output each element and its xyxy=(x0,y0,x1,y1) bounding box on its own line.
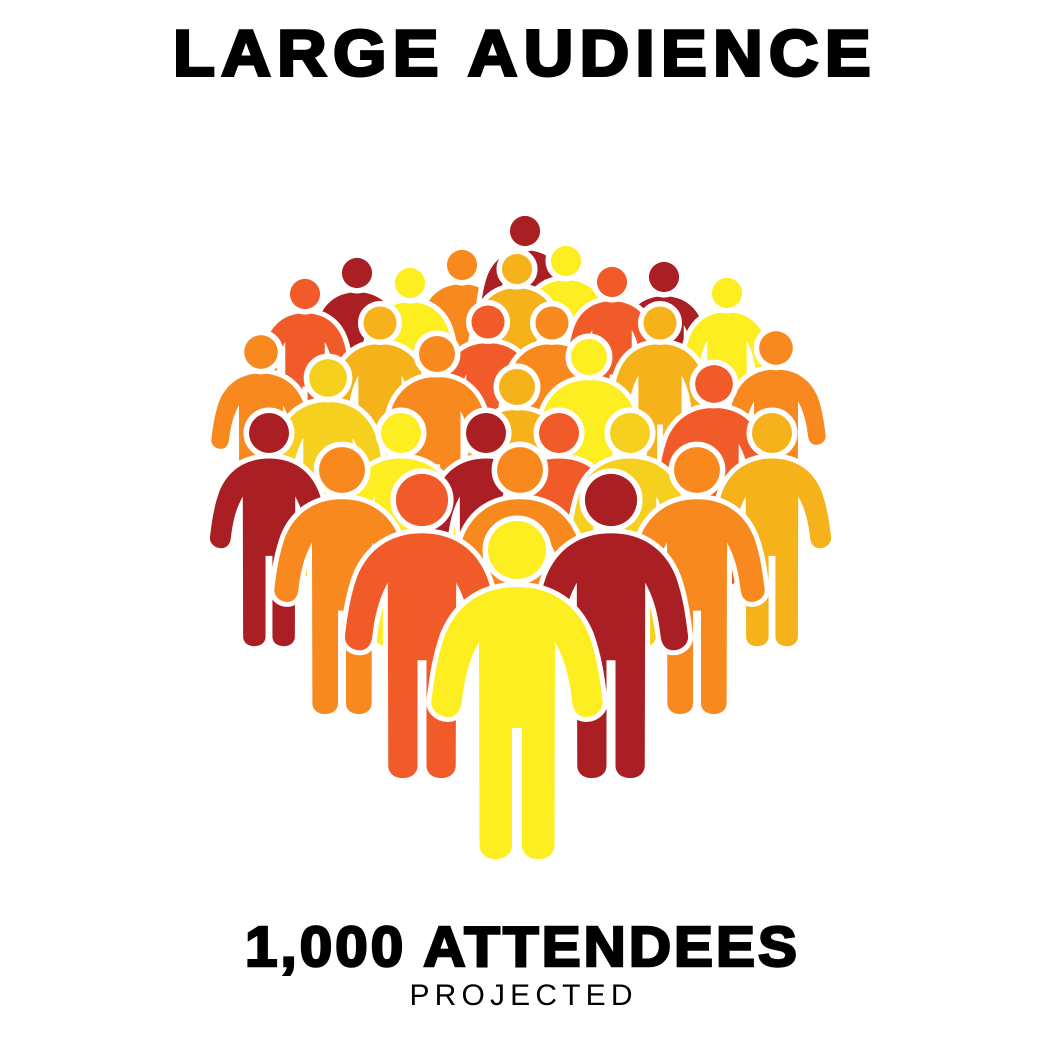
person: third row orange xyxy=(384,336,490,546)
person: second row orange-red xyxy=(439,305,537,498)
person: back row dark red xyxy=(312,258,402,434)
person: second row amber right xyxy=(611,306,709,499)
person: third row gold xyxy=(272,359,384,579)
person: back row dark red right xyxy=(619,262,709,438)
person: back row orange-red right xyxy=(567,267,657,443)
person: back row yellow far right xyxy=(682,278,772,454)
person: fourth row amber right xyxy=(713,413,831,646)
person: third row orange-red xyxy=(658,365,770,585)
person: far left orange xyxy=(211,335,311,531)
person: third row yellow xyxy=(536,339,642,549)
person: amber centre back xyxy=(472,254,562,430)
person: fourth row gold xyxy=(571,413,689,646)
projected label: PROJECTED xyxy=(410,979,632,1012)
person: sixth row orange-red xyxy=(345,474,499,778)
person: back row orange xyxy=(417,250,507,426)
person: second row orange xyxy=(503,306,601,499)
person: fifth row orange right xyxy=(629,447,765,714)
attendee count: 1,000 ATTENDEES xyxy=(245,915,800,979)
person: back row orange-red xyxy=(260,279,350,455)
person: fourth row yellow xyxy=(342,413,460,646)
person: front yellow xyxy=(431,521,603,859)
person: back row yellow right xyxy=(521,246,611,422)
person: fourth row orange-red centre xyxy=(500,413,618,646)
person: fourth row dark red left xyxy=(210,413,328,646)
person: second row amber xyxy=(331,306,429,499)
person: third row amber xyxy=(464,369,570,579)
person: fifth row orange centre xyxy=(452,447,588,714)
person: top dark red xyxy=(480,216,570,392)
person: fourth row dark red centre xyxy=(427,413,545,646)
person: back row yellow xyxy=(365,268,455,444)
person: far right orange xyxy=(726,331,826,527)
title: LARGE AUDIENCE xyxy=(173,18,877,90)
person: sixth row dark red xyxy=(534,474,688,778)
crowd illustration xyxy=(210,216,831,859)
person: fifth row orange left xyxy=(274,447,410,714)
